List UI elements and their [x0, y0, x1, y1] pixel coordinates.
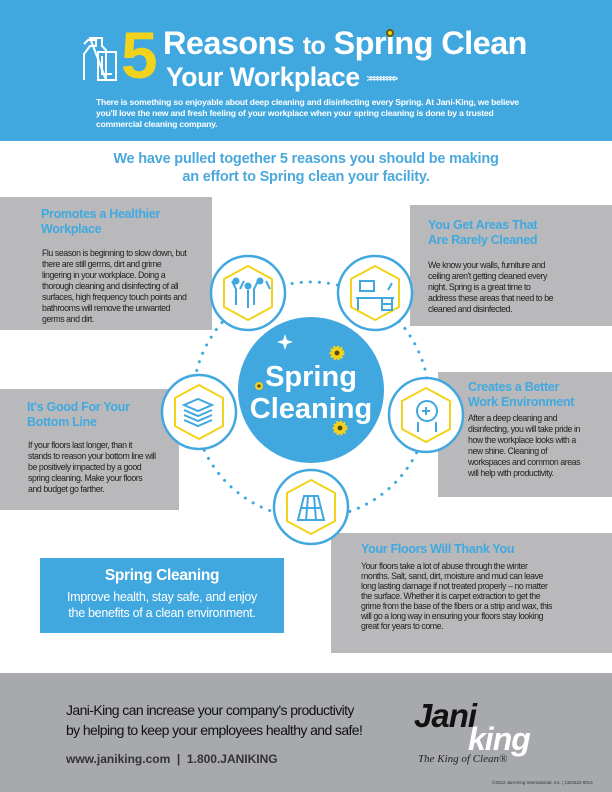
- callout: spring cleaning box: [40, 558, 284, 633]
- center circle: Cleaning: [250, 393, 372, 425]
- icon circles: [162, 256, 463, 544]
- panel: better work environment: Creates a Better: [468, 380, 559, 394]
- panel: better work environment: [438, 372, 612, 497]
- panel: floors: Your Floors Will Thank You: [361, 542, 514, 556]
- icon: flower on title: [386, 29, 394, 37]
- panel: floors: Your floors take a lot of abuse through the winter months. Salt, sand, dirt, moisture and mud can leave long lasting damage if not treated properly – no matter the surface. Whether it is carpet extraction to get the grime from the base of the fibers or a strip and wax, this will go a long way in ensuring your floors stay looking great for years to come.: [361, 561, 552, 631]
- logo: The King of Clean®: [418, 753, 507, 765]
- header band: [0, 0, 612, 141]
- panel: promotes a healthier workplace: [0, 197, 212, 330]
- title: Reasons to Spring Clean: [163, 25, 527, 61]
- panel: areas rarely cleaned: You Get Areas That: [428, 218, 537, 232]
- big number 5: 5: [121, 18, 158, 92]
- contact: www.janiking.com | 1.800.JANIKING: [66, 752, 278, 766]
- title: Your Workplace >>>>>>>>>: [166, 62, 396, 92]
- subtitle: [113, 151, 499, 185]
- logo: Jani: [414, 697, 476, 734]
- subtitle: We have pulled together 5 reasons you should be making: [113, 151, 499, 167]
- intro paragraph: There is something so enjoyable about deep cleaning and disinfecting every Spring. At Jani-King, we believe you'll love the new and fresh feeling of your workplace when your spring cleaning is done by a trusted commercial cleaning company.: [96, 97, 519, 129]
- logo: king: [468, 721, 530, 757]
- center circle: [238, 317, 384, 463]
- panel: areas rarely cleaned: We know your walls, furniture and ceiling aren't getting cleaned every night. Spring is a great time to address these areas that need to be cleaned and disinfected.: [428, 260, 553, 314]
- center circle: Spring: [265, 361, 357, 393]
- panel: bottom line: Bottom Line: [27, 415, 97, 429]
- footer message: Jani-King can increase your company's productivity: [66, 702, 354, 718]
- panel: areas rarely cleaned: Are Rarely Cleaned: [428, 233, 537, 247]
- callout: spring cleaning box: Spring Cleaning: [105, 567, 219, 584]
- panel: promotes a healthier workplace: Flu season is beginning to slow down, but there are still germs, dirt and grime lingering in your workplace. Doing a thorough cleaning and disinfecting of all surfaces, high frequency touch points and bathrooms will remove the unwanted germs and dirt.: [42, 248, 186, 324]
- panel: promotes a healthier workplace: Promotes a Healthier: [41, 207, 160, 221]
- panel: areas rarely cleaned: [410, 205, 612, 326]
- panel: floors: [331, 533, 612, 653]
- copyright: ©2022 Jani-King International, Inc. | CD0222-0014: [492, 780, 593, 785]
- title: [163, 25, 527, 92]
- footer: [0, 673, 612, 792]
- panel: better work environment: Work Environment: [468, 395, 574, 409]
- subtitle: an effort to Spring clean your facility.: [182, 169, 430, 185]
- panel: bottom line: If your floors last longer, than it stands to reason your bottom line will be positively impacted by a good spring cleaning. Make your floors and budget go farther.: [28, 440, 156, 494]
- panel: promotes a healthier workplace: Workplace: [41, 222, 101, 236]
- panel: bottom line: [0, 389, 179, 510]
- footer message: [66, 702, 362, 738]
- icon glyphs: [184, 278, 437, 520]
- panel: bottom line: It's Good For Your: [27, 400, 130, 414]
- panel: better work environment: After a deep cleaning and disinfecting, you will take pride in how the workplace looks with a new shine. Cleaning of workspaces and common areas will help with productivity.: [468, 413, 580, 478]
- icon: cleaning bottles: [83, 37, 117, 81]
- callout: spring cleaning box: the benefits of a clean environment.: [68, 606, 256, 620]
- logo: [414, 697, 530, 765]
- callout: spring cleaning box: Improve health, stay safe, and enjoy: [67, 590, 257, 604]
- footer message: by helping to keep your employees healthy and safe!: [66, 722, 362, 738]
